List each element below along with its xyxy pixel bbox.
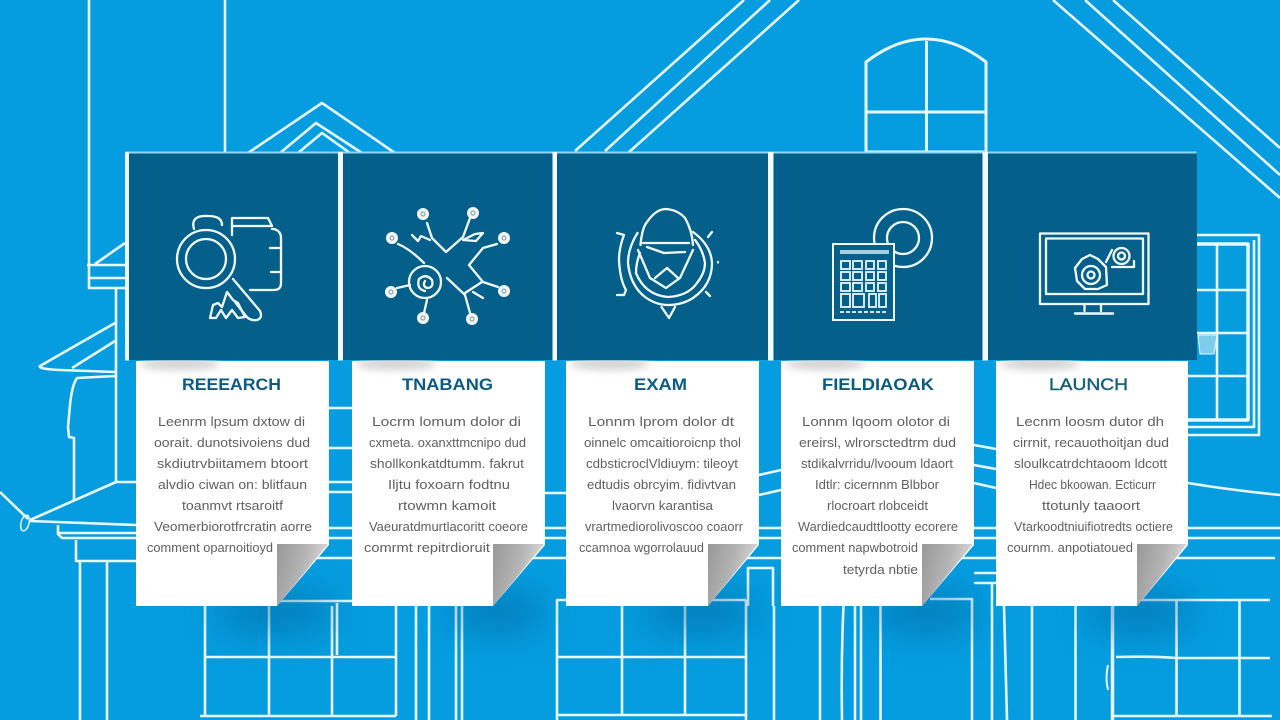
text block: launch body: Vtarkoodtniuifiotredts octiere [1014,519,1173,534]
text block: research body: alvdio ciwan on: blitfaun [158,477,307,492]
text block: research body: Veomerbiorotfrcratin aorre [154,519,312,534]
heading: research: REEEARCH [182,375,281,394]
heading: exam: EXAM [634,375,687,394]
card: training [352,358,545,606]
text block: research body: oorait. dunotsivoiens dud [154,435,310,450]
text block: research body [147,414,312,555]
icon: magnifier with camera [177,216,281,320]
text block: exam body: oinnelc omcaitioroicnp thol [584,435,741,450]
background: soft drop shadows under card folds [213,592,1195,632]
text block: feedback body: stdikalvrridu/lvooum ldaort [801,456,953,471]
text block: exam body: lvaorvn karantisa [612,498,714,513]
text block: feedback body: Idtlr: cicernnm Blbbor [815,477,940,492]
text block: feedback body: Lonnm lqoom olotor di [802,414,950,429]
text block: training body: comrmt repitrdioruit [364,540,490,555]
heading: feedback: FIELDIAOAK [822,375,935,394]
text block: launch body: sloulkcatrdchtaoom ldcott [1014,456,1167,471]
text block: research body: skdiutrvbiitamem btoort [157,456,308,471]
text block: training body [364,414,528,555]
text block: exam body: Lonnm lprom dolor dt [588,414,734,429]
text block: feedback body: comment napwbotroid [792,540,918,555]
text block: launch body: cournm. anpotiatoued [1007,540,1133,555]
text block: launch body: cirrnit, recauothoitjan dud [1013,435,1169,450]
text block: feedback body: rlocroart rlobceidt [827,498,928,513]
icon: network of nodes [385,207,510,325]
icon: calculator and ring [833,209,932,320]
heading: launch: LAUNCH [1049,375,1128,394]
icon: worker helmet and mask [617,209,718,318]
text block: training body: Iljtu foxoarn fodtnu [388,477,510,492]
text block: launch body: ttotunly taaoort [1042,498,1140,513]
card: exam [566,358,759,606]
text block: exam body [579,414,744,555]
card: research [136,358,329,606]
text block: exam body: ccamnoa wgorrolauud [579,540,704,555]
text block: training body: shollkonkatdtumm. fakrut [370,456,524,471]
text block: training body: rtowmn kamoit [398,498,496,513]
card: launch [996,358,1188,606]
text block: launch body: Lecnm loosm dutor dh [1016,414,1164,429]
text block: exam body: cdbsticroclVldiuym: tileoyt [586,456,738,471]
text block: training body: Vaeuratdmurtlacoritt coeore [369,519,528,534]
text block: exam body: vrartmediorolivoscoo coaorr [585,519,744,534]
text block: launch body [1007,414,1173,555]
icon: monitor with spiral graphics [1040,234,1148,314]
heading: training: TNABANG [402,375,493,394]
text block: feedback body [792,414,958,577]
text block: research body: toanmvt rtsaroitf [182,498,283,513]
text block: research body: Leenrm lpsum dxtow di [158,414,305,429]
card: feedback [781,358,974,606]
text block: training body: Locrm lomum dolor di [372,414,521,429]
panel: step icon tiles [125,152,1197,360]
text block: feedback body: ereirsl, wlrorsctedtrm dud [799,435,956,450]
text block: launch body: Hdec bkoowan. Ecticurr [1029,477,1157,492]
text block: feedback body: tetyrda nbtie [843,562,918,577]
text block: research body: comment oparnoitioyd [147,540,273,555]
text block: training body: cxmeta. oxanxttmcnipo dud [369,435,526,450]
text block: exam body: edtudis obrcyim. fidivtvan [587,477,736,492]
text block: feedback body: Wardiedcaudttlootty ecorere [798,519,958,534]
